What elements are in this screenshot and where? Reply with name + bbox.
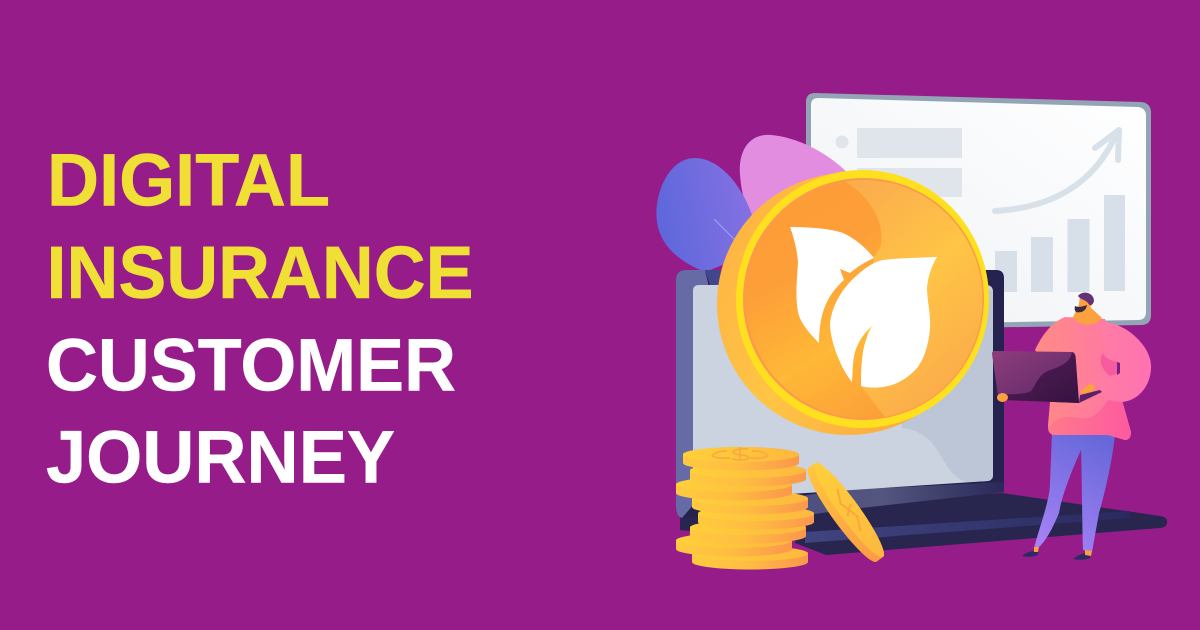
person with laptop <box>992 293 1151 560</box>
handheld laptop <box>992 351 1079 403</box>
title <box>46 138 474 498</box>
bar chart <box>995 195 1125 292</box>
legs <box>1034 433 1115 552</box>
growth arrow <box>995 130 1119 211</box>
illustration <box>656 93 1167 570</box>
laptop lid <box>676 270 1004 518</box>
torso <box>1035 317 1131 440</box>
neck <box>1073 305 1102 325</box>
heading line: CUSTOMER: CUSTOMER <box>46 324 456 406</box>
laptop base <box>680 493 1167 555</box>
icon: left leaf <box>790 227 874 343</box>
head and beard <box>1078 296 1094 312</box>
heading line: INSURANCE: INSURANCE <box>46 231 474 314</box>
laptop <box>676 270 1167 555</box>
coin stack <box>676 447 814 570</box>
heading line: DIGITAL: DIGITAL <box>47 138 330 222</box>
icon: right leaf <box>830 257 937 388</box>
laptop screen <box>693 285 993 500</box>
heading line: JOURNEY: JOURNEY <box>46 416 395 498</box>
large gold coin with leaves <box>717 170 989 435</box>
decorative leaves <box>656 135 850 272</box>
presentation board with chart <box>806 93 1151 329</box>
feet <box>1022 548 1039 557</box>
tilted coin <box>800 457 891 568</box>
dollar mark on top coin <box>712 447 768 461</box>
hands <box>1080 383 1096 396</box>
arm <box>1088 322 1151 402</box>
